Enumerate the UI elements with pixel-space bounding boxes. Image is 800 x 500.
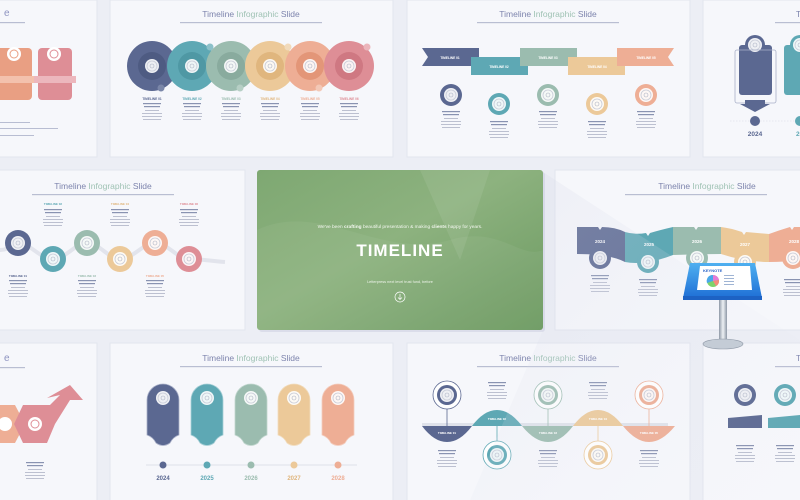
ribbons: TIMELINE 04: [587, 65, 607, 69]
wave: TIMELINE 04: [589, 417, 607, 421]
slide: sine wave timeline: [407, 343, 690, 500]
circles: [433, 381, 663, 469]
circles: [589, 247, 800, 273]
ribbon: [577, 227, 800, 263]
wave: TIMELINE 05: [640, 431, 658, 435]
slide: wavy circles timeline: TIMELINE 05: [146, 274, 164, 278]
slide: wavy circles timeline: TIMELINE 04: [111, 202, 129, 206]
labels: TIMELINE 06: [339, 97, 359, 101]
slide: wavy circles timeline: TIMELINE 06: [180, 202, 198, 206]
ribbons: TIMELINE 03: [538, 56, 558, 60]
wave: TIMELINE 01: [438, 431, 456, 435]
slide: partial right wave ribbon: [555, 170, 800, 330]
slide: partial bottom-right: [703, 343, 800, 500]
title text: TIMELINE: [356, 241, 444, 260]
labels: TIMELINE 05: [300, 97, 320, 101]
circles: [127, 41, 374, 92]
ribbons: TIMELINE 02: [489, 65, 509, 69]
ribbon: 2027: [740, 242, 751, 247]
wave: TIMELINE 02: [488, 417, 506, 421]
slide: wavy circles timeline: Timeline Infographic Slide: [54, 181, 152, 191]
hero: green title slide: Letterpress next level trust fund, before: [367, 280, 433, 284]
years: 2025: [200, 476, 214, 482]
slide: sine wave timeline: Timeline Infographic Slide: [499, 353, 597, 363]
labels: TIMELINE 04: [260, 97, 280, 101]
ribbon: 2024: [595, 239, 606, 244]
years: 2027: [287, 476, 301, 482]
labels: TIMELINE 03: [221, 97, 241, 101]
years: [156, 476, 345, 482]
pills: [147, 384, 354, 468]
labels: TIMELINE 02: [182, 97, 202, 101]
slide: ribbon timeline: [407, 0, 690, 157]
slide: partial top-left: e: [4, 8, 10, 19]
title: Timeline Infographic Slide: [202, 9, 300, 19]
slide: wavy circles timeline: TIMELINE 03: [78, 274, 96, 278]
slide: pill cards timeline: [110, 343, 393, 500]
slide: partial top-left: [0, 0, 97, 157]
slide: circle chain timeline: [110, 0, 393, 157]
ribbon: 2025: [644, 242, 655, 247]
ribbons: TIMELINE 05: [636, 56, 656, 60]
icon: keynote podium: KEYNOTE: [703, 268, 723, 273]
icon: keynote podium: [683, 263, 762, 349]
slide: wavy circles timeline: TIMELINE 02: [44, 202, 62, 206]
pin 2024: [730, 35, 800, 138]
slide: bottom-left arrow hexagons: [0, 343, 97, 500]
years: 2026: [244, 476, 258, 482]
circles: [5, 230, 202, 272]
icon: down arrow: [395, 292, 405, 302]
slide: bottom-left arrow hexagons: e: [4, 353, 10, 364]
pin 2024: 2024: [748, 131, 763, 138]
slide: pill cards timeline: Timeline Infographic Slide: [202, 353, 300, 363]
labels: TIMELINE 01: [142, 97, 162, 101]
years: 2024: [156, 476, 170, 482]
ribbon: 2028: [789, 239, 800, 244]
cards: [0, 47, 76, 100]
slide: partial top-right pins: [703, 0, 800, 157]
years: 2028: [331, 476, 345, 482]
labels: [142, 97, 359, 101]
wave: [422, 410, 675, 442]
hero: green title slide: We've been crafting beautiful presentation & making clients happy for years.: [318, 224, 482, 230]
slide: ribbon timeline: Timeline Infographic Slide: [499, 9, 597, 19]
wave: TIMELINE 03: [539, 431, 557, 435]
circles: [440, 84, 657, 115]
slide: wavy circles timeline: [0, 170, 245, 330]
hero: green title slide: [257, 170, 545, 332]
slide: wavy circles timeline: TIMELINE 01: [9, 274, 27, 278]
shadow overlay: [470, 172, 800, 500]
ribbon: 2026: [692, 239, 703, 244]
slide: partial right wave ribbon: Timeline Infographic Slide: [658, 181, 756, 191]
ribbons: TIMELINE 01: [440, 56, 460, 60]
ribbons: [422, 48, 674, 75]
